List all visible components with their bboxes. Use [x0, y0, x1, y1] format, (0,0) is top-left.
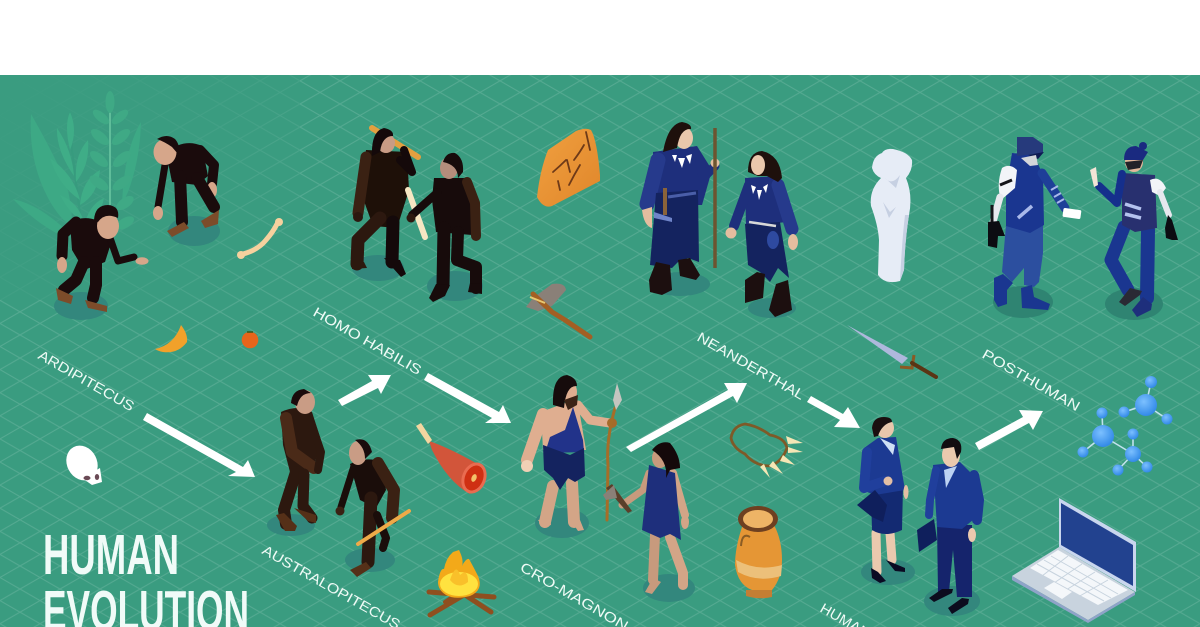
icon: campfire	[429, 550, 494, 615]
arrow: Homo Habilis to Cro-Magnon	[424, 373, 511, 423]
label: Cro-Magnon: CRO-MAGNON	[518, 559, 631, 627]
figure: neanderthal woman	[726, 151, 798, 318]
icon: tooth necklace	[731, 424, 803, 478]
arrow: Human to Posthuman	[975, 410, 1043, 450]
arrow: Australopitecus to Homo Habilis	[338, 375, 391, 406]
icon: bone	[237, 218, 283, 259]
icon: venus statue	[871, 149, 912, 282]
arrow: Cro-Magnon to Neanderthal	[626, 383, 747, 452]
white header band	[0, 0, 1200, 75]
label: Posthuman: POSTHUMAN	[980, 346, 1083, 414]
arrow: Ardipitecus to Australopitecus	[143, 413, 255, 477]
icon: sword	[847, 325, 936, 377]
icon: laptop	[1012, 498, 1136, 623]
icon: stone axe	[526, 284, 590, 337]
figure: australopitecus standing	[267, 389, 321, 536]
figure: posthuman woman	[1090, 142, 1178, 320]
label: Ardipitecus: ARDIPITECUS	[36, 347, 137, 414]
title: HUMAN	[43, 523, 179, 587]
icon: rock with cave paintings	[537, 129, 600, 207]
icon: skull	[60, 440, 104, 486]
label: Neanderthal: NEANDERTHAL	[695, 329, 808, 403]
figure: homo habilis with club	[352, 128, 418, 281]
figure: posthuman man	[988, 137, 1081, 318]
figure: cro-magnon man	[521, 375, 622, 538]
figure: ardipitecus crouching right	[153, 136, 220, 246]
figure: neanderthal man	[642, 122, 720, 296]
figure: human woman	[857, 417, 915, 585]
label: Homo Habilis: HOMO HABILIS	[311, 304, 424, 378]
label: Australopitecus: AUSTRALOPITECUS	[260, 542, 403, 627]
figure: ardipitecus crouching left	[54, 205, 148, 320]
figure: homo habilis with bone	[406, 153, 483, 302]
title	[43, 523, 249, 627]
icon: orange	[242, 332, 258, 348]
icon: plants	[13, 91, 141, 234]
icon: banana	[155, 325, 187, 352]
figure: australopitecus with bone	[336, 439, 409, 577]
figure: cro-magnon woman	[603, 442, 695, 602]
icon: molecules	[1078, 376, 1172, 476]
icon: ham	[416, 423, 491, 497]
figure: human man	[917, 438, 980, 616]
icon: clay vase	[735, 506, 782, 598]
arrow: Neanderthal to Human	[807, 396, 860, 428]
